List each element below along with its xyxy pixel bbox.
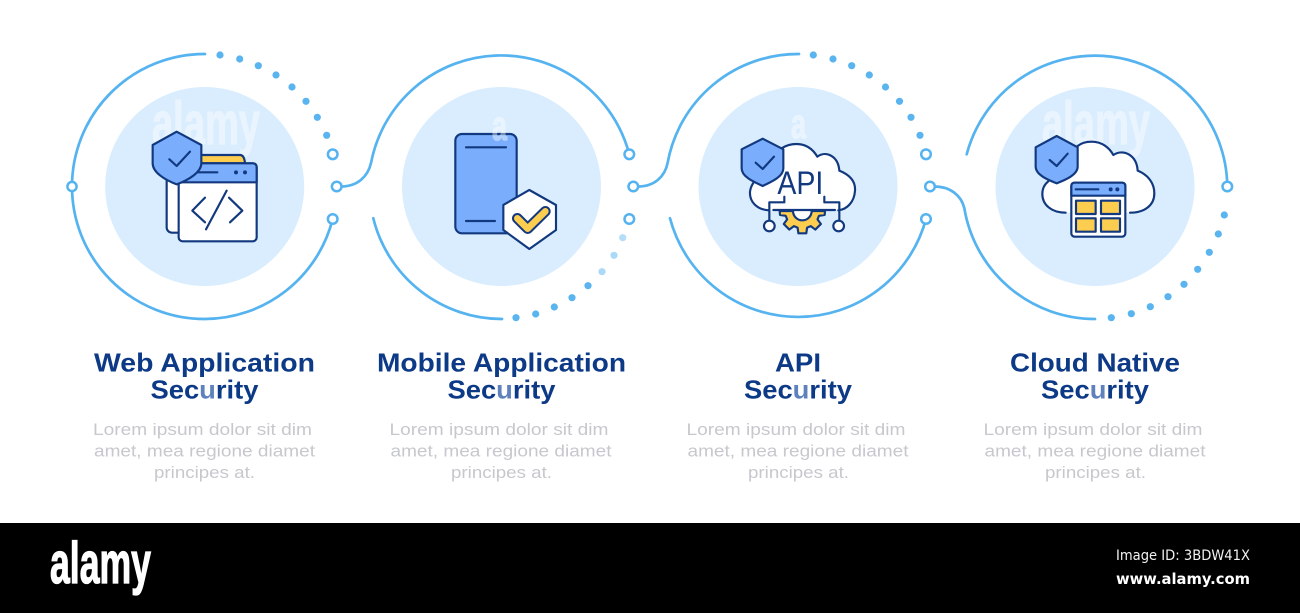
- body text: principes at.: [748, 463, 849, 482]
- step 1 background disc: [105, 87, 304, 286]
- connector to step 3: [628, 54, 799, 191]
- step 3 lower arc and dots: [670, 51, 931, 317]
- body text: amet, mea regione diamet: [688, 442, 909, 460]
- heading: web application security: Security: [150, 374, 256, 404]
- footer band: [0, 523, 1300, 613]
- body text: amet, mea regione diamet: [94, 442, 315, 460]
- step 2 background disc: [402, 87, 601, 286]
- heading: mobile application security: Security: [448, 374, 553, 404]
- connector to step 2: [332, 55, 629, 191]
- step 2 lower arc and dots: [373, 150, 634, 321]
- step 3 background disc: [698, 87, 898, 286]
- body text: Lorem ipsum dolor sit dim: [686, 420, 906, 439]
- heading: mobile application security: Mobile Application: [377, 348, 626, 378]
- icon: phone with shield: [455, 134, 556, 249]
- icon label: API: API: [777, 165, 823, 201]
- heading: web application security: Web Application: [94, 348, 315, 378]
- body text: principes at.: [451, 463, 552, 482]
- icon: api cloud with gear: [742, 139, 855, 233]
- heading: api security: Security: [744, 374, 850, 404]
- step 4 top arc and dots: [967, 56, 1232, 321]
- step 3: api security: [670, 51, 1095, 482]
- step 4 background disc: [996, 87, 1194, 286]
- icon: code window with shield: [153, 132, 257, 241]
- watermark: alamy: [152, 90, 260, 157]
- body text: amet, mea regione diamet: [984, 442, 1206, 460]
- body text: Lorem ipsum dolor sit dim: [390, 420, 608, 439]
- heading: cloud native security: Security: [1041, 374, 1147, 404]
- footer logo: alamy: [50, 531, 151, 596]
- body text: principes at.: [154, 463, 255, 482]
- website: www.alamy.com: [1116, 570, 1250, 588]
- step 4: cloud native security: [967, 56, 1232, 482]
- image id: Image ID: 3BDW41X: [1116, 548, 1250, 564]
- step 1 ring path: [67, 51, 338, 319]
- watermark: alamy: [1042, 90, 1150, 157]
- heading: cloud native security: Cloud Native: [1010, 348, 1180, 378]
- icon: cloud with app window: [1036, 136, 1154, 237]
- body text: principes at.: [1045, 463, 1146, 482]
- watermark: a: [791, 100, 806, 147]
- body text: Lorem ipsum dolor sit dim: [93, 420, 312, 439]
- step 2: mobile application security: [373, 54, 799, 482]
- heading: api security: API: [775, 348, 821, 378]
- watermark: a: [492, 102, 507, 149]
- body text: amet, mea regione diamet: [390, 442, 612, 460]
- body text: Lorem ipsum dolor sit dim: [984, 420, 1202, 439]
- connector to step 4: [925, 182, 1095, 319]
- step 1: web application security: [67, 51, 629, 482]
